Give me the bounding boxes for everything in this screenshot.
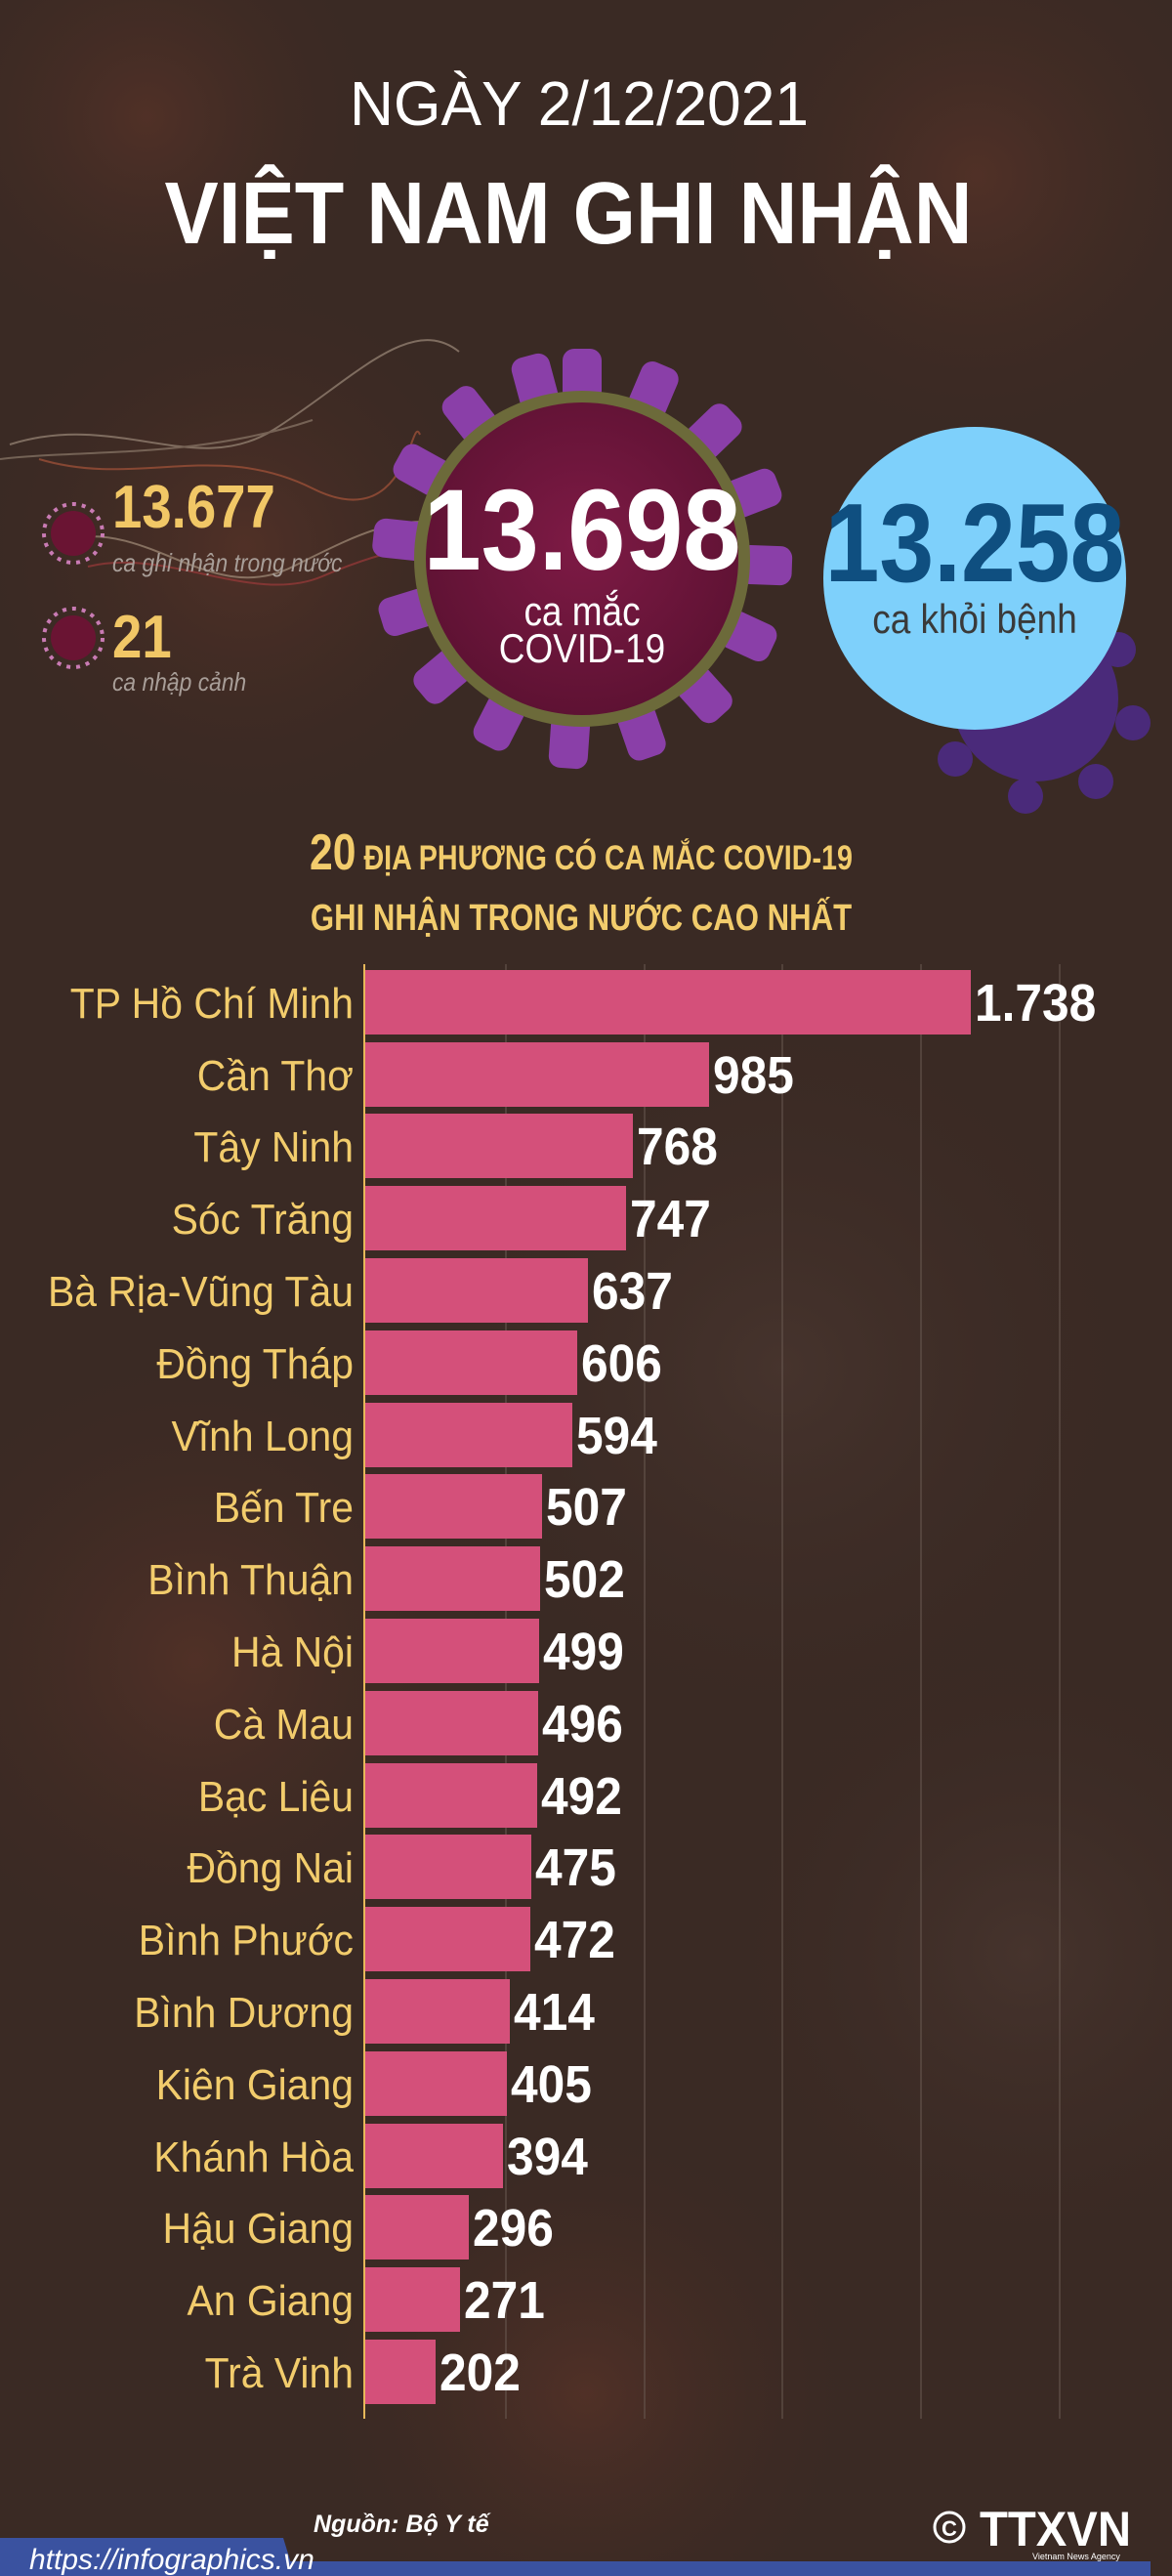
source: Nguồn: Bộ Y tế [314, 2511, 491, 2538]
bar chart: Trà Vinh [205, 2350, 354, 2397]
title: main: VIỆT NAM GHI NHẬN [164, 163, 973, 263]
bar chart [48, 964, 1096, 2419]
logo: TTXVN: C [942, 2516, 957, 2541]
icon: small virus 2 [44, 609, 103, 667]
bar chart: 271 [464, 2270, 545, 2329]
bar chart: 502 [544, 1549, 625, 1608]
footer: url bar: https://infographics.vn [29, 2544, 314, 2576]
main virus: total cases: 13.698 [424, 465, 740, 594]
bar chart: Sóc Trăng [172, 1197, 354, 1244]
bar chart: Đồng Nai [187, 1845, 354, 1892]
bar chart: Bình Thuận [147, 1557, 354, 1604]
bar chart: Đồng Tháp [156, 1341, 354, 1388]
icon: small virus 1 [44, 504, 103, 563]
chart heading [310, 824, 853, 939]
chart heading: GHI NHẬN TRONG NƯỚC CAO NHẤT [311, 896, 852, 939]
icon: purple virus behind [920, 583, 1151, 814]
bar chart: An Giang [187, 2278, 354, 2325]
bar chart: 475 [535, 1837, 616, 1896]
main virus: total cases: ca mắc [523, 589, 641, 635]
bar chart: 747 [630, 1189, 711, 1247]
stat: imported cases [44, 604, 246, 697]
bar chart: Tây Ninh [193, 1124, 354, 1171]
bar chart: 472 [534, 1910, 615, 1968]
stat: domestic cases: 13.677 [112, 474, 275, 541]
bar chart: Cà Mau [214, 1702, 354, 1749]
bar chart: Hậu Giang [162, 2206, 354, 2253]
bar chart: 296 [473, 2198, 554, 2257]
bar chart: Kiên Giang [156, 2062, 354, 2109]
bar chart: TP Hồ Chí Minh [70, 981, 354, 1028]
bar chart: Bình Dương [134, 1990, 354, 2037]
bar chart: 507 [546, 1477, 627, 1536]
bar chart: 594 [576, 1406, 657, 1464]
stat: domestic cases [44, 474, 342, 577]
bar chart: Bạc Liêu [198, 1774, 354, 1821]
bar chart: 414 [514, 1982, 595, 2041]
main virus: total cases [371, 349, 793, 770]
bar chart: Bà Rịa-Vũng Tàu [48, 1269, 354, 1316]
stat: imported cases: ca nhập cảnh [112, 669, 246, 697]
footer: url bar [0, 2538, 1151, 2576]
recovered circle: 13.258 [825, 481, 1124, 605]
bar chart: 637 [592, 1261, 673, 1320]
title: date: NGÀY 2/12/2021 [350, 68, 809, 139]
bar chart: 768 [637, 1117, 718, 1175]
bar chart: 1.738 [975, 973, 1096, 1032]
main virus: total cases: COVID-19 [499, 626, 665, 672]
bar chart: 499 [543, 1622, 624, 1680]
bar chart: Bình Phước [139, 1918, 354, 1964]
bar chart: 202 [440, 2343, 521, 2401]
bar chart: 496 [542, 1694, 623, 1753]
bar chart: 606 [581, 1333, 662, 1392]
bar chart: Hà Nội [231, 1629, 354, 1676]
bar chart: 492 [541, 1766, 622, 1825]
bar chart: Vĩnh Long [172, 1414, 354, 1460]
bar chart: Khánh Hòa [153, 2134, 354, 2181]
bar chart: Cần Thơ [197, 1053, 354, 1100]
bar chart: 405 [511, 2054, 592, 2113]
chart heading: 20 ĐỊA PHƯƠNG CÓ CA MẮC COVID-19 [310, 824, 853, 881]
stat: imported cases: 21 [112, 604, 172, 671]
stat: domestic cases: ca ghi nhận trong nước [112, 550, 342, 577]
bar chart: 985 [713, 1045, 794, 1104]
bar chart: Bến Tre [214, 1485, 354, 1532]
recovered circle: ca khỏi bệnh [872, 597, 1077, 643]
recovered circle [823, 427, 1151, 814]
decorative lines [0, 340, 479, 585]
logo: TTXVN [935, 2502, 1131, 2561]
logo: TTXVN: TTXVN [980, 2502, 1131, 2556]
logo: TTXVN: Vietnam News Agency [1032, 2552, 1120, 2561]
bar chart: 394 [507, 2127, 588, 2185]
